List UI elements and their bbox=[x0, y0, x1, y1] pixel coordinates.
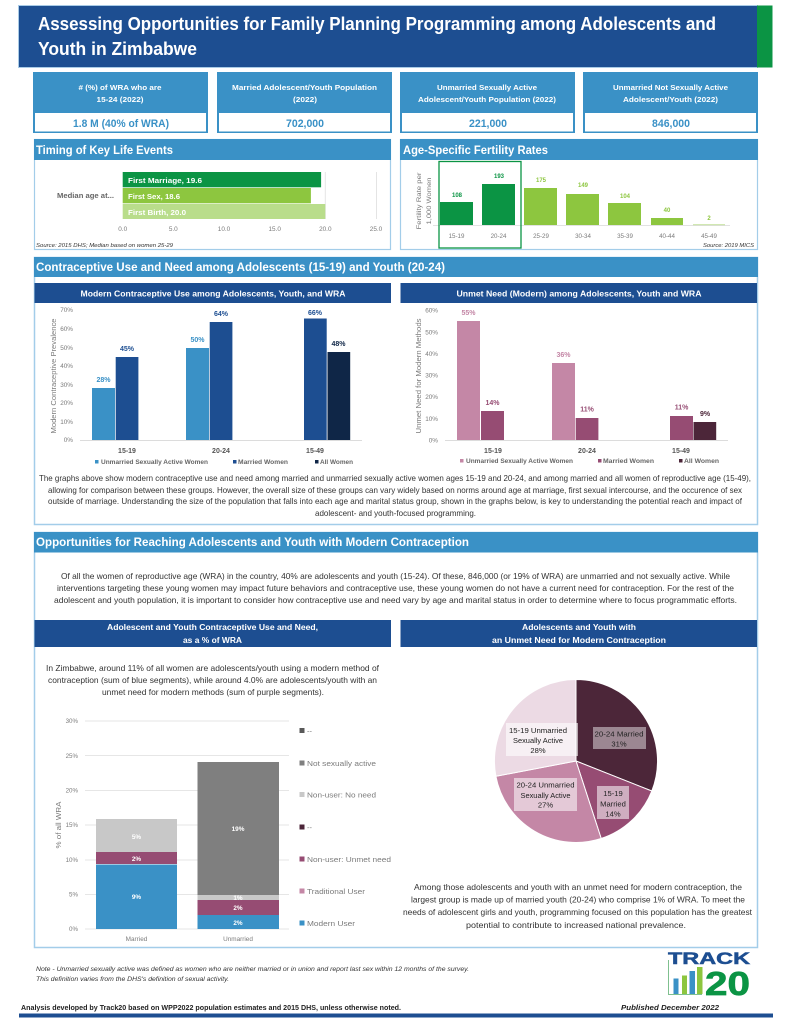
pie label: 20-24 unmarried: 20-24 Unmarried bbox=[516, 780, 574, 790]
chart: modern contraceptive use: 60% bbox=[60, 326, 73, 333]
sub-panel heading: unmet need: Adolescents and Youth with bbox=[522, 623, 636, 632]
bar: first sex bbox=[123, 188, 311, 203]
fertility values: 193 bbox=[494, 174, 505, 180]
legend: Married Women bbox=[238, 459, 288, 466]
KPI card: married population bbox=[218, 72, 392, 132]
chart: unmet need: Unmet Need for Modern Methods bbox=[414, 318, 423, 433]
text block: pie explanation: largest group is made up of married youth (20-24) who comprise 1% of WRA. To meet the bbox=[411, 894, 745, 904]
panel: age-specific fertility rates: 45-49 bbox=[701, 233, 717, 240]
stacked bar chart: 10% bbox=[66, 857, 78, 864]
fertility values: 40 bbox=[664, 208, 671, 214]
panel: timing of key life events: Source: 2015 DHS; Median based on women 25-29 bbox=[36, 243, 173, 249]
chart: modern contraceptive use: 70% bbox=[60, 307, 73, 314]
text block: pie explanation: Among those adolescents and youth with an unmet need for modern contraception, the bbox=[414, 882, 742, 892]
chart: unmet need: 60% bbox=[425, 308, 438, 314]
title banner: Youth in Zimbabwe bbox=[38, 39, 197, 59]
bar: unmarried: 2% bbox=[233, 905, 243, 912]
panel: age-specific fertility rates: Age-Specific Fertility Rates bbox=[403, 143, 548, 157]
fertility values: 104 bbox=[620, 194, 631, 200]
pie label: 15-19 unmarried bbox=[506, 723, 578, 756]
fertility values: 149 bbox=[578, 183, 589, 189]
legend: All Women bbox=[684, 458, 719, 465]
pie label: 15-19 married: Married bbox=[600, 800, 626, 808]
pie label: 15-19 unmarried: Sexually Active bbox=[513, 736, 563, 745]
legend bbox=[300, 726, 391, 928]
stacked bar chart: 20% bbox=[66, 788, 78, 794]
KPI card: unmarried sexually active: Adolescent/Youth Population (2022) bbox=[418, 95, 556, 104]
text block: stacked chart note: unmet need for modern methods (sum of purple segments). bbox=[102, 688, 324, 697]
fertility values: 2 bbox=[707, 216, 711, 222]
panel: timing of key life events: Timing of Key Life Events bbox=[36, 143, 173, 157]
chart: modern contraceptive use bbox=[34, 283, 391, 466]
KPI card: WRA 15-24: 15-24 (2022) bbox=[96, 95, 144, 104]
KPI card: WRA 15-24: # (%) of WRA who are bbox=[78, 83, 162, 92]
KPI card: married population: 702,000 bbox=[286, 118, 324, 130]
pie label: 15-19 unmarried: 28% bbox=[530, 746, 546, 755]
panel: age-specific fertility rates: 35-39 bbox=[617, 233, 633, 240]
legend: Modern User bbox=[307, 919, 356, 928]
pie label: 20-24 unmarried bbox=[514, 778, 577, 811]
fertility bars bbox=[440, 184, 725, 225]
value labels: 64% bbox=[214, 311, 229, 318]
panel: contraceptive use and need: Contraceptive Use and Need among Adolescents (15-19) and Youth (20-24) bbox=[36, 260, 445, 274]
text block: pie explanation: needs of adolescent girls and youth, programming focused on this population has the greatest bbox=[403, 907, 753, 917]
KPI card: WRA 15-24 bbox=[34, 72, 208, 132]
pie label: 15-19 married: 15-19 bbox=[603, 789, 623, 798]
chart: modern contraceptive use: Modern Contraceptive Use among Adolescents, Youth, and WRA bbox=[80, 288, 346, 298]
text block: intro: Of all the women of reproductive age (WRA) in the country, 40% are adolescents and youth (15-24). Of these, 846,000 (or 19% of WRA) are unmarried and not sexually active. While bbox=[61, 571, 730, 581]
chart: modern contraceptive use: Modern Contraceptive Prevalence bbox=[49, 318, 58, 434]
text block: graph explanation: outside of marriage. Understanding the size of the population that falls into each age and marital status group, shown in the graphs below, is key to understanding the potential reach and impact of bbox=[48, 497, 743, 506]
legend: Non-user: No need bbox=[307, 790, 376, 800]
legend: Not sexually active bbox=[307, 759, 376, 768]
sub-panel heading: unmet need: an Unmet Need for Modern Contraception bbox=[492, 636, 666, 645]
panel: age-specific fertility rates: Source: 2019 MICS bbox=[703, 243, 754, 249]
bar: first sex: First Sex, 18.6 bbox=[128, 192, 180, 201]
bar: married: 2% bbox=[132, 856, 141, 863]
y axis title bbox=[416, 172, 433, 230]
chart: modern contraceptive use: 50% bbox=[60, 345, 73, 352]
pie label: 15-19 married: 14% bbox=[605, 810, 621, 818]
chart: unmet need: Unmet Need (Modern) among Adolescents, Youth and WRA bbox=[456, 288, 702, 298]
value labels: 28% bbox=[96, 377, 111, 384]
panel: timing of key life events: 0.0 bbox=[118, 226, 128, 233]
panel: timing of key life events: 5.0 bbox=[169, 226, 178, 233]
panel: timing of key life events: 20.0 bbox=[319, 226, 332, 233]
stacked bar chart: 25% bbox=[66, 753, 78, 760]
fertility values: 175 bbox=[536, 178, 547, 184]
bar: unmarried: 2% bbox=[233, 920, 243, 927]
bar: unmarried: 1% bbox=[233, 895, 243, 902]
KPI card: unmarried not sexually active: 846,000 bbox=[652, 118, 690, 130]
bar: married: 5% bbox=[132, 834, 141, 841]
text block: pie explanation: potential to contribute to increased national prevalence. bbox=[466, 920, 686, 930]
panel: contraceptive use and need bbox=[34, 257, 758, 524]
text block: graph explanation bbox=[39, 474, 751, 518]
logo: Track20: 20 bbox=[705, 965, 750, 1002]
chart: modern contraceptive use: 40% bbox=[60, 363, 73, 370]
bar: unmarried bbox=[198, 762, 279, 929]
title banner: Assessing Opportunities for Family Planning Programming among Adolescents and bbox=[38, 14, 716, 34]
stacked bar chart: 5% bbox=[69, 892, 78, 898]
panel: opportunities: Opportunities for Reaching Adolescents and Youth with Modern Contraception bbox=[36, 535, 469, 549]
chart: modern contraceptive use: 0% bbox=[64, 437, 73, 444]
bars bbox=[92, 318, 350, 440]
value labels bbox=[96, 310, 346, 384]
legend bbox=[460, 458, 719, 465]
value labels: 9% bbox=[700, 411, 711, 418]
text block: intro: adolescent and youth population, it is important to consider how contraceptive use and need vary by age and marital status in order to determine where to focus programmatic efforts. bbox=[54, 595, 737, 605]
y axis title: 1,000 Women bbox=[426, 177, 433, 224]
chart: unmet need: 15-49 bbox=[672, 448, 690, 455]
text block: graph explanation: The graphs above show modern contraceptive use and need among married and unmarried sexually active women ages 15-19 and 20-24, and among married and all women of reproductive age (15-49), bbox=[39, 474, 751, 483]
fertility values bbox=[452, 174, 711, 222]
y axis title: Fertility Rate per bbox=[416, 172, 423, 230]
value labels: 36% bbox=[556, 352, 571, 359]
text block: stacked chart note: contraception (sum of blue segments), while around 4.0% are adolescents/youth with an bbox=[48, 676, 377, 685]
chart: modern contraceptive use: 10% bbox=[60, 419, 73, 426]
KPI card: unmarried sexually active: 221,000 bbox=[469, 118, 507, 130]
value labels: 11% bbox=[580, 406, 595, 414]
panel: timing of key life events: 25.0 bbox=[370, 226, 383, 233]
bar: married bbox=[96, 819, 177, 929]
legend: Non-user: Unmet need bbox=[307, 855, 391, 864]
panel: age-specific fertility rates: 40-44 bbox=[659, 233, 675, 240]
pie label: 20-24 married bbox=[593, 727, 646, 749]
chart: modern contraceptive use: 20% bbox=[60, 400, 73, 407]
sub-panel heading: unmet need bbox=[400, 620, 757, 647]
legend: Unmarried Sexually Active Women bbox=[101, 459, 208, 466]
bar: first marriage: First Marriage, 19.6 bbox=[128, 176, 202, 185]
chart: unmet need: 20% bbox=[425, 394, 438, 401]
panel: age-specific fertility rates: 15-19 bbox=[449, 233, 465, 240]
chart: unmet need: 50% bbox=[425, 330, 438, 336]
value labels: 11% bbox=[675, 404, 689, 412]
value labels: 45% bbox=[120, 346, 135, 353]
chart: unmet need: 30% bbox=[425, 372, 438, 380]
sub-panel heading: use and need as % of WRA: as a % of WRA bbox=[183, 636, 242, 645]
stacked bar chart: 0% bbox=[69, 926, 78, 933]
legend bbox=[95, 459, 353, 466]
logo: Track20: TRACK bbox=[668, 950, 750, 968]
chart: modern contraceptive use: 15-19 bbox=[118, 448, 136, 455]
logo: Track20 bbox=[668, 950, 750, 1002]
panel: timing of key life events bbox=[34, 139, 391, 250]
legend: Married Women bbox=[603, 458, 654, 465]
bar: first marriage bbox=[123, 172, 321, 187]
stacked bar chart bbox=[54, 718, 391, 943]
KPI card: unmarried not sexually active bbox=[584, 72, 758, 132]
panel: opportunities bbox=[34, 532, 758, 948]
pie chart bbox=[494, 679, 658, 843]
text block: intro bbox=[54, 571, 737, 605]
bar: unmarried: 19% bbox=[232, 826, 245, 833]
fertility values: 108 bbox=[452, 193, 463, 199]
legend: Unmarried Sexually Active Women bbox=[466, 458, 573, 465]
pie label: 15-19 married bbox=[597, 786, 629, 819]
legend: -- bbox=[307, 726, 312, 736]
footer bbox=[19, 1005, 773, 1018]
panel: age-specific fertility rates: 20-24 bbox=[491, 233, 507, 240]
title banner bbox=[18, 6, 772, 68]
pie label: 20-24 married: 31% bbox=[611, 740, 627, 748]
KPI card: unmarried sexually active bbox=[400, 72, 574, 132]
value labels: 48% bbox=[331, 341, 346, 348]
pie label: 20-24 unmarried: Sexually Active bbox=[520, 791, 570, 800]
stacked bar chart: 15% bbox=[66, 822, 78, 829]
chart: modern contraceptive use: 15-49 bbox=[306, 448, 324, 455]
text block: graph explanation: adolescent- and youth-focused programming. bbox=[315, 509, 476, 518]
text block: intro: interventions targeting these young women may impact future behaviors and contraceptive use, these young women do not have a current need for contraception. For the rest of the bbox=[57, 583, 734, 593]
bars bbox=[457, 321, 716, 440]
pie label: 15-19 unmarried: 15-19 Unmarried bbox=[509, 726, 567, 735]
stacked bar chart: % of all WRA bbox=[54, 801, 63, 848]
KPI card: unmarried sexually active: Unmarried Sexually Active bbox=[437, 83, 537, 92]
chart: unmet need: 15-19 bbox=[484, 448, 502, 455]
legend: -- bbox=[307, 823, 312, 832]
KPI card: married population: Married Adolescent/Youth Population bbox=[232, 83, 377, 92]
KPI card: married population: (2022) bbox=[293, 95, 318, 104]
value labels: 66% bbox=[308, 310, 323, 317]
KPI card: WRA 15-24: 1.8 M (40% of WRA) bbox=[73, 118, 169, 130]
sub-panel heading: use and need as % of WRA: Adolescent and Youth Contraceptive Use and Need, bbox=[107, 623, 318, 632]
panel: timing of key life events: Median age at... bbox=[57, 191, 114, 200]
legend: All Women bbox=[320, 459, 353, 466]
chart: modern contraceptive use: 20-24 bbox=[212, 448, 230, 455]
footer: Analysis developed by Track20 based on WPP2022 population estimates and 2015 DHS, unless otherwise noted. bbox=[21, 1005, 401, 1012]
value labels: 50% bbox=[190, 337, 205, 344]
chart: unmet need bbox=[400, 283, 757, 465]
bar: first birth bbox=[123, 204, 325, 219]
value labels: 55% bbox=[461, 310, 476, 317]
chart: unmet need: 20-24 bbox=[578, 448, 596, 455]
chart: unmet need: 40% bbox=[425, 351, 438, 358]
bar: married: 9% bbox=[132, 894, 141, 901]
highlight box: 15-24 bbox=[439, 162, 521, 248]
panel: age-specific fertility rates: 25-29 bbox=[533, 233, 549, 240]
chart: modern contraceptive use: 30% bbox=[60, 382, 73, 389]
note: Note - Unmarried sexually active was defined as women who are neither married or in union and report last sex within 12 months of the survey. bbox=[36, 966, 469, 973]
panel: timing of key life events: 15.0 bbox=[268, 226, 281, 233]
legend: Traditional User bbox=[307, 887, 366, 896]
sub-panel heading: use and need as % of WRA bbox=[34, 620, 391, 647]
panel: timing of key life events: 10.0 bbox=[218, 226, 231, 233]
stacked bar chart: Unmarried bbox=[223, 936, 253, 943]
panel: age-specific fertility rates bbox=[400, 139, 758, 250]
text block: pie explanation bbox=[403, 882, 753, 930]
note bbox=[36, 966, 469, 983]
text block: stacked chart note bbox=[46, 664, 380, 697]
text block: graph explanation: allowing for comparison between these groups. However, the overall size of these groups can vary widely based on norms around age at marriage, first sexual intercourse, and the occurence of sex bbox=[48, 486, 742, 495]
pie label: 20-24 married: 20-24 Married bbox=[594, 730, 644, 738]
value labels bbox=[461, 310, 711, 418]
text block: stacked chart note: In Zimbabwe, around 11% of all women are adolescents/youth using a modern method of bbox=[46, 664, 380, 673]
KPI card: unmarried not sexually active: Adolescent/Youth (2022) bbox=[623, 95, 718, 104]
KPI card: unmarried not sexually active: Unmarried Not Sexually Active bbox=[613, 83, 728, 92]
pie label: 20-24 unmarried: 27% bbox=[538, 800, 553, 810]
stacked bar chart: Married bbox=[126, 936, 148, 943]
chart: unmet need: 10% bbox=[425, 416, 438, 423]
value labels: 14% bbox=[485, 400, 500, 407]
note: This definition varies from the DHS's definition of sexual activity. bbox=[36, 976, 229, 983]
chart: unmet need: 0% bbox=[429, 438, 438, 444]
stacked bar chart: 30% bbox=[66, 718, 78, 725]
panel: age-specific fertility rates: 30-34 bbox=[575, 233, 591, 240]
footer: Published December 2022 bbox=[621, 1005, 719, 1012]
bar: first birth: First Birth, 20.0 bbox=[128, 208, 186, 217]
